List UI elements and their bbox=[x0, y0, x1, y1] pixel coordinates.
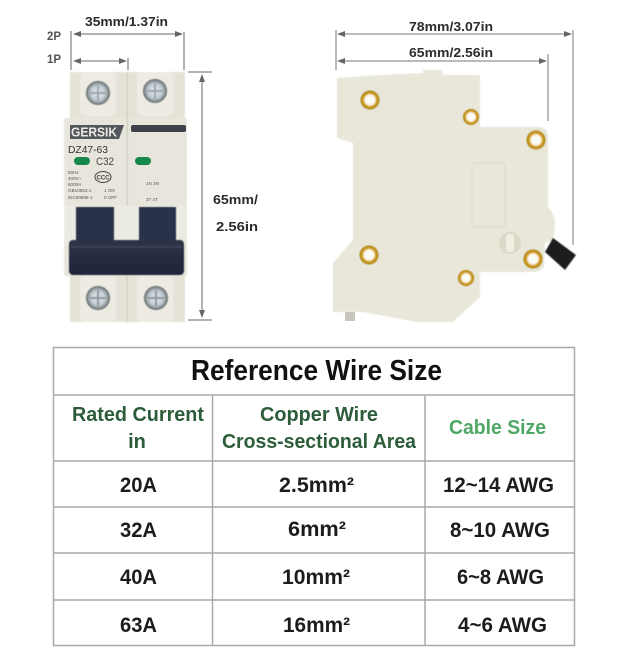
spec text bbox=[68, 170, 159, 202]
table grid bbox=[53, 348, 575, 646]
mounting rivets bbox=[360, 90, 546, 286]
dimension: height bbox=[188, 72, 258, 320]
spec text: 1 ON bbox=[104, 188, 115, 193]
row: 40A bbox=[120, 566, 544, 589]
photo: side view of breaker bbox=[333, 70, 576, 322]
width value: 35mm/1.37in bbox=[85, 14, 168, 29]
recessed panel bbox=[472, 163, 505, 227]
spec text: 400V~ bbox=[68, 176, 82, 181]
spec text: 2T 4T bbox=[146, 197, 158, 202]
row: 20A: 12~14 AWG bbox=[443, 474, 554, 497]
depth arrows bbox=[336, 30, 573, 245]
row: 32A: 8~10 AWG bbox=[450, 519, 550, 542]
row: 20A: 2.5mm² bbox=[279, 474, 354, 497]
photo: front view of breaker bbox=[64, 72, 187, 322]
header: rated current: in bbox=[128, 431, 146, 453]
height value: 65mm/ bbox=[213, 192, 258, 207]
row: 63A: 16mm² bbox=[283, 614, 350, 637]
row: 20A: 20A bbox=[120, 474, 157, 497]
header: cable size: Cable Size bbox=[449, 417, 546, 439]
adjustment dial bbox=[499, 232, 521, 254]
row: 63A: 63A bbox=[120, 614, 157, 637]
row: 40A: 6~8 AWG bbox=[457, 566, 544, 589]
breaker body bbox=[64, 72, 187, 322]
row: 32A: 6mm² bbox=[288, 518, 346, 541]
table: reference wire size bbox=[53, 348, 575, 646]
65mm value: 65mm/2.56in bbox=[409, 45, 493, 60]
spec text: 1N 3N bbox=[146, 181, 159, 186]
row: 32A: 32A bbox=[120, 519, 157, 542]
left indicator bbox=[74, 157, 90, 165]
header: copper wire area: Copper Wire bbox=[260, 404, 378, 426]
right label bar bbox=[131, 125, 186, 132]
dimension: depth bbox=[336, 19, 573, 245]
spec text: GB10963.1 bbox=[68, 188, 92, 193]
1P label: 1P bbox=[47, 54, 61, 66]
row: 63A bbox=[120, 614, 547, 637]
certification mark bbox=[95, 172, 111, 182]
bottom clip bbox=[345, 312, 355, 321]
screw terminals bbox=[86, 79, 168, 310]
row: 20A bbox=[120, 474, 554, 497]
right indicator bbox=[135, 157, 151, 165]
spec text: 0 OFF bbox=[104, 195, 117, 200]
table title: Reference Wire Size bbox=[191, 355, 442, 387]
spec text: IEC60898-1 bbox=[68, 195, 93, 200]
brand label: GERSIK bbox=[71, 126, 117, 140]
78mm value: 78mm/3.07in bbox=[409, 19, 493, 34]
height arrows bbox=[188, 72, 212, 320]
header: copper wire area: Cross-sectional Area bbox=[222, 431, 417, 453]
model text: DZ47-63 bbox=[68, 144, 108, 156]
row: 40A: 10mm² bbox=[282, 566, 350, 589]
width arrows bbox=[71, 31, 184, 70]
row: 32A bbox=[120, 518, 550, 542]
height value: 2.56in bbox=[216, 219, 258, 234]
black toggle bbox=[545, 238, 576, 270]
header: copper wire area bbox=[222, 404, 417, 453]
2P label: 2P bbox=[47, 31, 61, 43]
toggle handle bbox=[69, 207, 184, 275]
row: 63A: 4~6 AWG bbox=[458, 614, 547, 637]
dimension: width 2P and 1P bbox=[47, 14, 184, 70]
spec text: 6000A bbox=[68, 182, 82, 187]
row: 40A: 40A bbox=[120, 566, 157, 589]
housing bbox=[333, 70, 555, 322]
header: rated current: Rated Current bbox=[72, 404, 204, 426]
certification mark: CCC bbox=[96, 176, 110, 182]
header: rated current bbox=[72, 404, 204, 453]
spec text: 50Hz bbox=[68, 170, 79, 175]
height value bbox=[213, 192, 258, 234]
current rating: C32 bbox=[96, 156, 114, 168]
